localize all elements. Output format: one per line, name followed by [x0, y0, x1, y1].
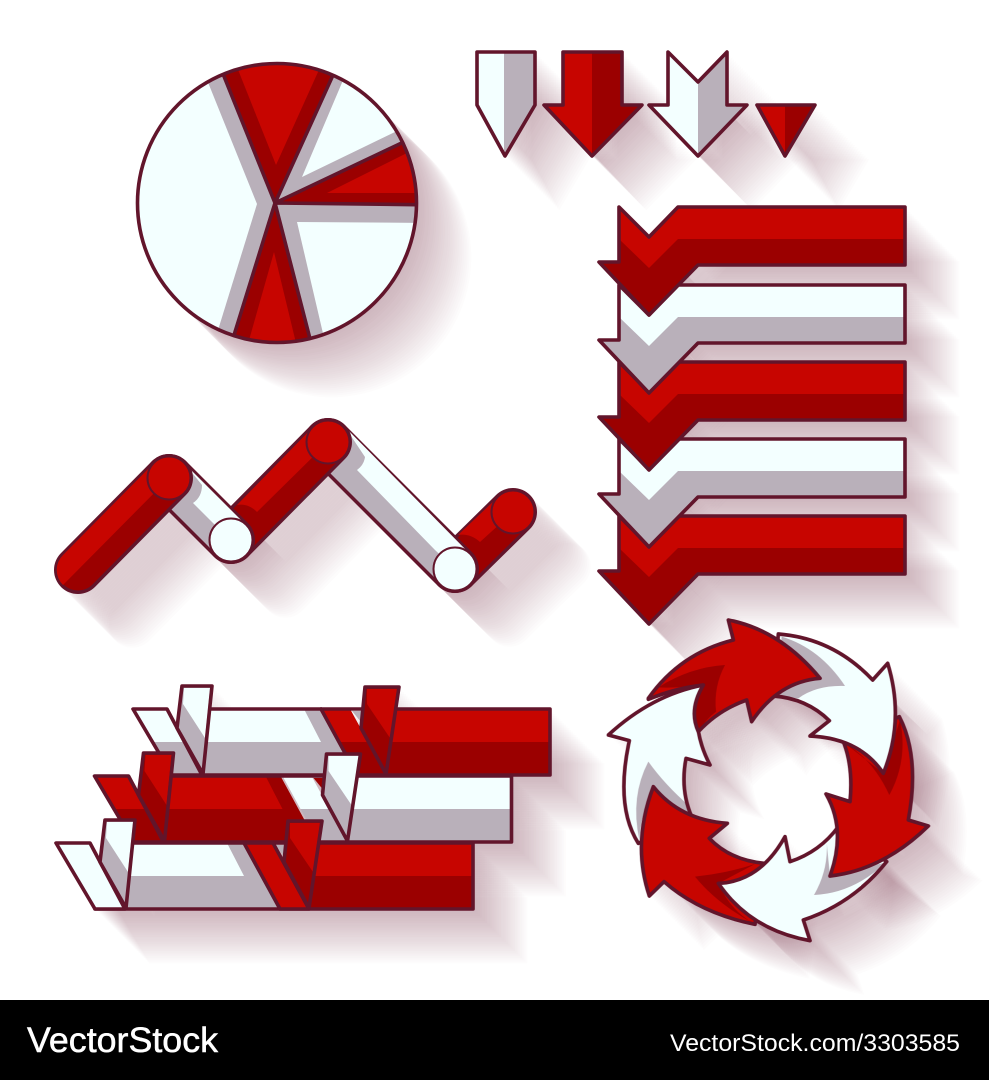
ring arrow: white upper right [773, 634, 895, 773]
list row 4: white [599, 439, 905, 547]
arrow: white notched arrow [649, 52, 747, 156]
list row 1: red [599, 207, 905, 315]
ring arrow: white left [608, 685, 710, 843]
tube 3: red rising [231, 420, 350, 540]
arrow: white pentagon [477, 52, 535, 156]
slice: white upper right [279, 78, 400, 199]
list row 5: red [599, 516, 905, 624]
pie chart [100, 37, 447, 372]
stacked arrow list [599, 207, 905, 624]
ring arrow: red lower left [641, 787, 764, 924]
tube 2: short white [169, 463, 252, 562]
tube 5: red end [455, 490, 534, 569]
ribbon row: middle, red then white [94, 753, 512, 842]
slice: red top [226, 65, 330, 198]
tube 1: red start [57, 456, 191, 585]
ring arrow: white bottom [718, 827, 887, 941]
arrow: red down arrow [544, 52, 642, 156]
circular arrows ring [608, 620, 928, 941]
footer url: VectorStock.com/3303585 [670, 1030, 960, 1057]
ring arrow: red right [826, 717, 928, 876]
slice: red bottom [236, 210, 308, 341]
footer bar [0, 1000, 989, 1080]
slice: white lower right [278, 205, 414, 336]
ribbon row: top, white then red [133, 686, 550, 775]
top row of down arrows [477, 52, 815, 156]
slice: red right [282, 144, 415, 203]
stepped ribbon bar chart [56, 686, 550, 909]
slice: large white left [140, 76, 273, 333]
tube 4: long white [328, 427, 476, 590]
list row 3: red [599, 362, 905, 470]
footer brand: VectorStock [27, 1021, 219, 1060]
arrow: red triangle [757, 105, 815, 156]
zigzag tube line chart [57, 420, 535, 590]
ribbon row: bottom, white then red [56, 820, 473, 909]
ring arrow: red top [648, 620, 820, 732]
list row 2: white [599, 285, 905, 393]
